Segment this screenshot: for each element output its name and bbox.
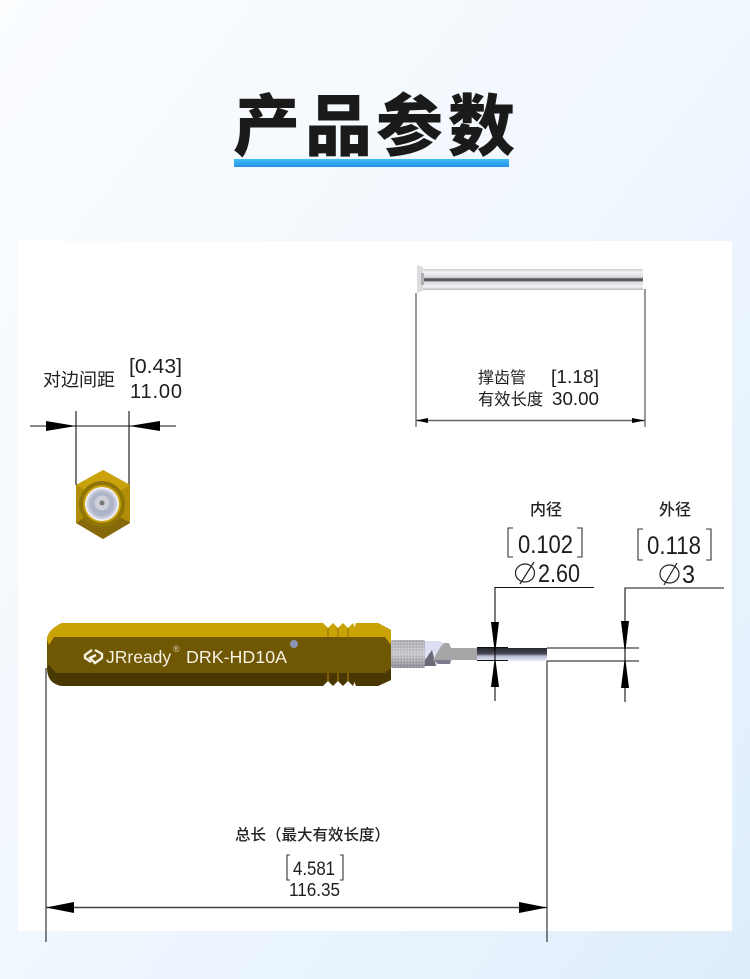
- panel: outer diameter dimension: [547, 496, 724, 702]
- value: diameter: [516, 560, 580, 588]
- value: across flats: [129, 356, 182, 403]
- brand text: [106, 644, 287, 667]
- value: across flats: 11.00: [130, 381, 182, 403]
- arrows: [621, 621, 629, 688]
- value: inch: [1.18]: [551, 366, 599, 387]
- panel: drawing sheet: [18, 241, 732, 931]
- arrows: [416, 418, 645, 423]
- handle: [47, 623, 391, 686]
- label: overall length: 总长（最大有效长度）: [235, 823, 390, 845]
- title underline: [234, 159, 509, 167]
- brackets: [287, 855, 343, 880]
- label: across flats: 对边间距: [43, 370, 115, 390]
- value: mm: 30.00: [552, 388, 599, 409]
- value: across flats: [0.43]: [129, 356, 182, 378]
- leader lines: [477, 588, 594, 701]
- icon: JRready logo: [85, 650, 102, 663]
- value: diameter: 2.60: [538, 560, 580, 588]
- brackets: [638, 529, 711, 560]
- dimension lines: [416, 289, 645, 427]
- leader lines: [547, 588, 724, 702]
- brand text: JRready: [106, 647, 171, 667]
- icon: hex end view: [76, 470, 130, 539]
- tube tip: [477, 648, 547, 661]
- blade: [425, 641, 477, 666]
- brackets: [508, 528, 582, 557]
- label: inner diameter: 内径: [530, 496, 562, 520]
- value: inch: 0.118: [647, 532, 701, 560]
- value: diameter: [660, 561, 695, 589]
- value: inch: 0.102: [518, 531, 573, 559]
- dimension lines: [30, 411, 176, 485]
- arrows: [46, 902, 547, 913]
- value: mm: 116.35: [289, 879, 340, 900]
- icon: support tube: [417, 265, 643, 293]
- panel: support tube dimension: [416, 265, 645, 427]
- title: 产品参数: [233, 73, 515, 170]
- panel: inner diameter dimension: [477, 496, 594, 701]
- brand text: ®: [173, 644, 180, 654]
- panel: across-flats dimension: [30, 356, 182, 539]
- arrows: [46, 421, 160, 431]
- value: inch: 4.581: [293, 858, 335, 880]
- knurled collar: [391, 640, 425, 668]
- label: effective length: 有效长度: [478, 391, 543, 409]
- tool: extraction tool: [47, 623, 547, 686]
- label: outer diameter: 外径: [659, 496, 691, 520]
- value: diameter: 3: [682, 561, 695, 589]
- grip notches: [323, 623, 356, 686]
- screw: [290, 640, 298, 648]
- arrows: [491, 622, 499, 687]
- brand text: DRK-HD10A: [186, 647, 287, 667]
- panel: overall length dimension: [46, 661, 547, 942]
- label: support tube: 撑齿管: [478, 369, 526, 387]
- dimension lines: [46, 661, 547, 942]
